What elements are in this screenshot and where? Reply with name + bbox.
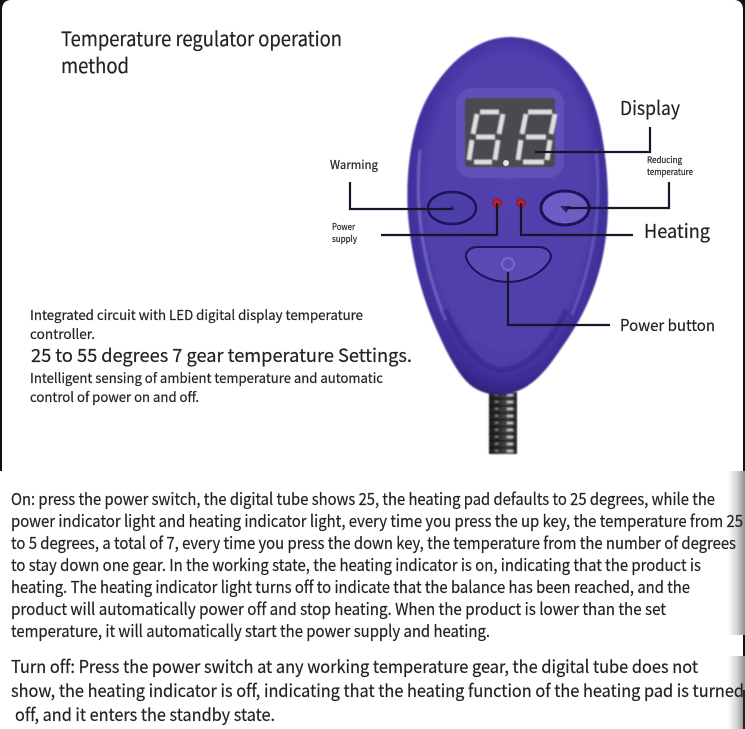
reducing temperature button [541, 191, 589, 225]
power indicator light [492, 198, 502, 208]
feature description [30, 304, 412, 406]
label: reducing temperature [647, 154, 693, 178]
callout line: warming [350, 182, 452, 209]
power button [466, 247, 551, 282]
label: display: Display [620, 94, 680, 121]
label: power supply [332, 220, 357, 245]
label: heating: Heating [644, 217, 710, 244]
label: warming: Warming [330, 156, 378, 173]
instructions: turning on [11, 486, 743, 642]
callout line: power supply [381, 203, 497, 235]
instructions: turning off: Turn off: Press the power switch at any working temperature gear, the digital tube does not [11, 654, 698, 679]
heating indicator light [516, 198, 526, 208]
label: power button: Power button [620, 312, 715, 336]
warming button [428, 192, 476, 224]
feature description: 25 to 55 degrees 7 gear temperature Settings. [31, 342, 412, 368]
instructions: turning on: temperature, it will automatically start the power supply and heating. [11, 618, 490, 642]
feature description: control of power on and off. [30, 386, 199, 406]
label: power supply: Power [332, 220, 355, 233]
digital display [465, 98, 555, 167]
callout line: power button [508, 272, 610, 325]
instructions: turning off: off, and it enters the standby state. [15, 702, 275, 727]
controller body [407, 37, 608, 395]
photo frame edges [0, 0, 745, 471]
callout line: reducing temperature [565, 182, 669, 208]
title [61, 23, 342, 79]
instructions: turning on: heating. The heating indicator light turns off to indicate that the balance has been reached, and the [11, 574, 690, 598]
title: Temperature regulator operation [61, 23, 342, 52]
feature description: controller. [30, 323, 95, 343]
right edge shading [728, 471, 745, 729]
callout line: display [535, 127, 650, 152]
instructions: turning off [11, 654, 744, 727]
feature description: Integrated circuit with LED digital display temperature [30, 304, 363, 324]
title: method [61, 50, 129, 79]
feature description: Intelligent sensing of ambient temperature and automatic [30, 367, 383, 387]
flexible metal neck [489, 392, 517, 454]
illustration: temperature controller [407, 37, 608, 454]
label: reducing temperature: Reducing [647, 154, 682, 166]
label: power supply: supply [332, 232, 357, 245]
instructions: turning on: product will automatically power off and stop heating. When the product is lower than the set [11, 596, 666, 620]
callout line: heating [521, 203, 633, 235]
label: reducing temperature: temperature [647, 166, 693, 178]
